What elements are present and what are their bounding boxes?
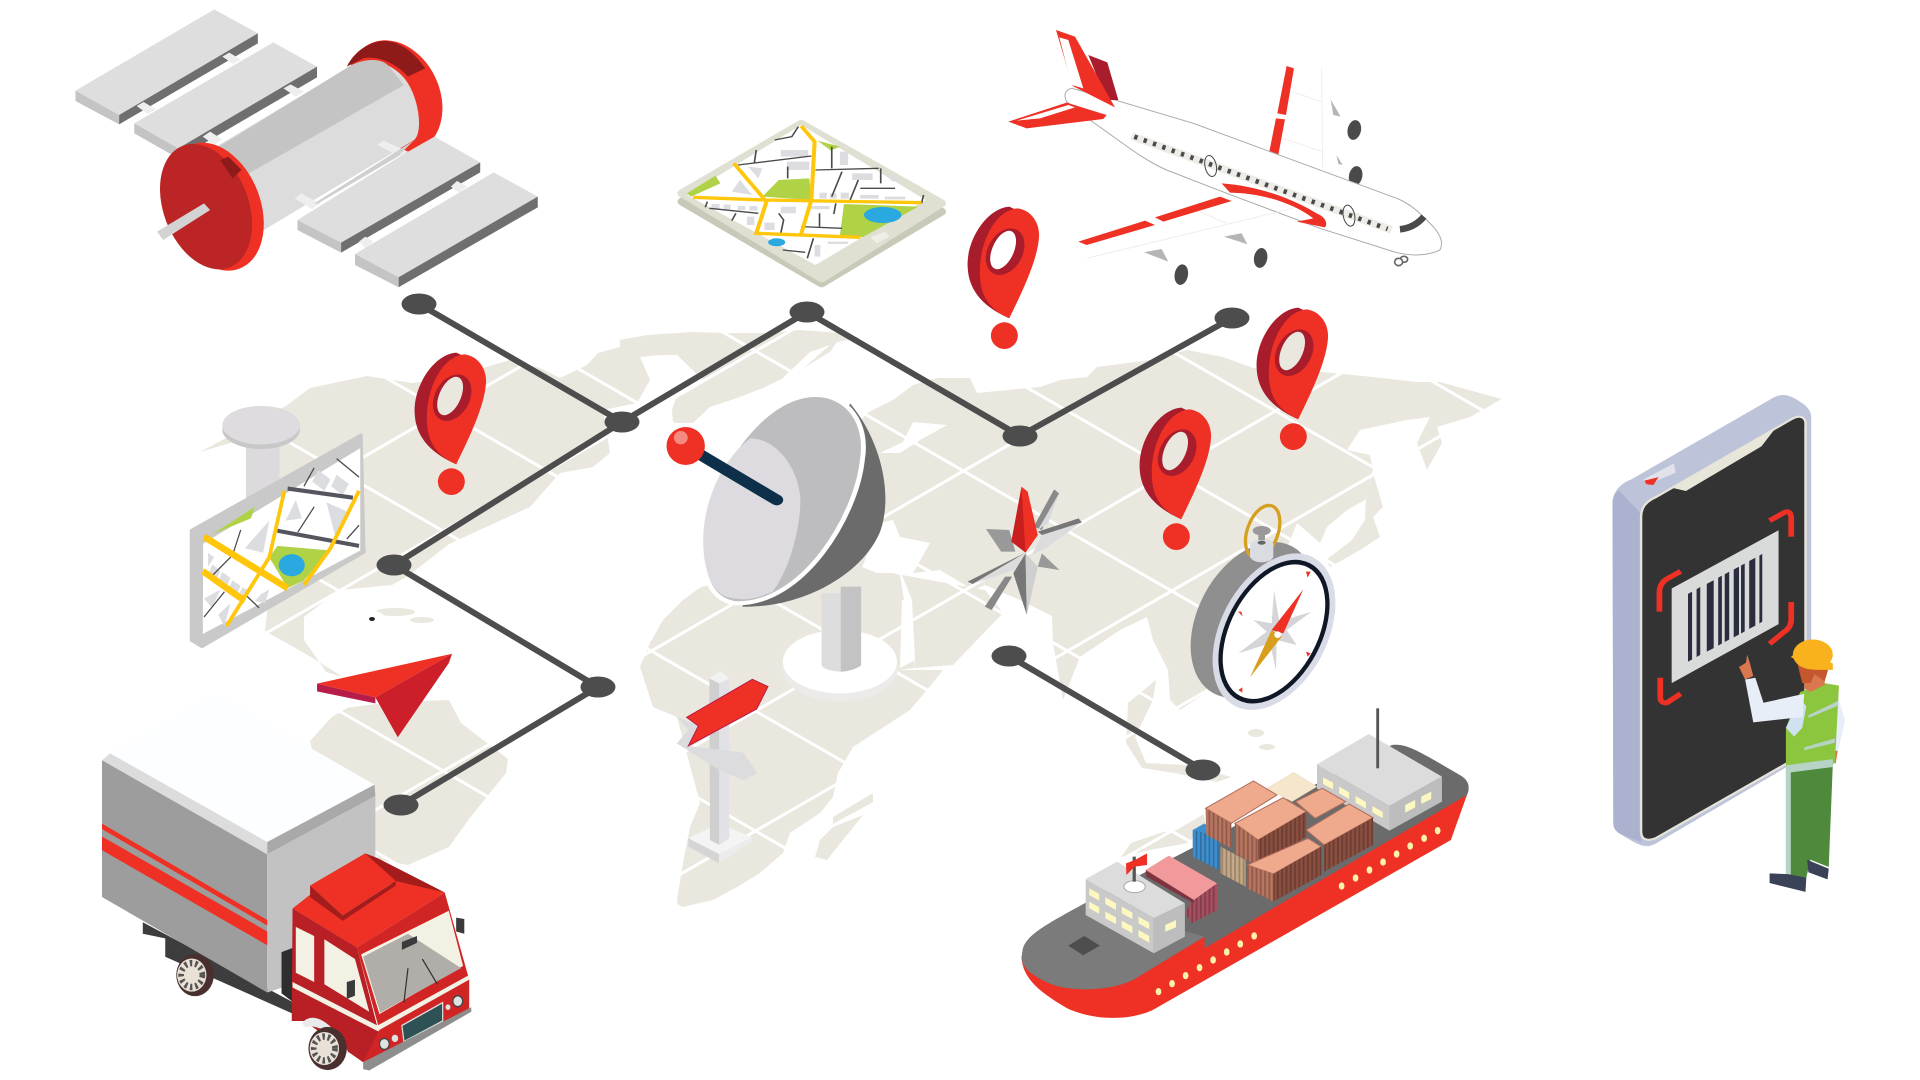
- landmass: japan: [1326, 473, 1383, 567]
- icon: satellite: [75, 9, 538, 287]
- icon: roadside gps billboard: [191, 406, 364, 646]
- icon: airplane: [1008, 30, 1442, 286]
- solar panels lower: [295, 137, 538, 287]
- landmass: south america: [310, 700, 508, 865]
- landmass: indonesia: [1126, 680, 1231, 782]
- icon: compass star: [968, 487, 1082, 615]
- solar panels upper: [75, 9, 317, 158]
- deck: [1022, 745, 1469, 989]
- red sign: [687, 679, 768, 746]
- truck chassis and rear wheel: [143, 922, 294, 1014]
- icon: map pin far right: [1257, 308, 1328, 450]
- billboard post: [222, 406, 300, 500]
- billboard map detail: [203, 459, 359, 626]
- landmass: eurasia: [780, 350, 1505, 710]
- map buildings: [711, 150, 905, 257]
- icon: map pin left: [415, 353, 486, 495]
- icon: navigation arrow: [317, 654, 452, 737]
- bow building: [1086, 853, 1185, 953]
- compass rose and needle: [1238, 572, 1312, 693]
- icon: map pin above plane: [968, 207, 1039, 349]
- scan brackets: [1659, 512, 1791, 703]
- icon: cargo ship: [1021, 708, 1469, 1018]
- dish base: [782, 587, 898, 702]
- map parks and water: [687, 141, 918, 246]
- route network: [376, 294, 1250, 816]
- landmass: africa: [640, 563, 943, 908]
- cargo box: [102, 694, 375, 1003]
- cabin windows: [1132, 136, 1424, 230]
- barcode: [1672, 530, 1779, 683]
- stern building: [1317, 708, 1442, 831]
- landmass: madagascar: [815, 815, 863, 860]
- landmass: arabia: [902, 575, 1003, 668]
- icon: pocket compass: [1165, 501, 1361, 731]
- compass loop and knob: [1239, 501, 1286, 563]
- fuselage: [1065, 88, 1442, 255]
- compass casing: [1165, 521, 1361, 731]
- islands: [375, 608, 1275, 750]
- tail: [1008, 30, 1118, 128]
- far wing and engines: [1269, 66, 1364, 187]
- phone notch and speaker: [1643, 428, 1776, 491]
- icon: signpost: [677, 671, 768, 863]
- world map: [200, 330, 1505, 908]
- signpost base: [688, 823, 752, 863]
- dish back: [742, 403, 885, 607]
- landmass: east african islet: [833, 793, 873, 824]
- lower sign: [677, 717, 757, 780]
- signpost pole: [709, 671, 729, 845]
- far disc: [334, 32, 456, 161]
- icon: satellite dish: [667, 395, 898, 702]
- inland seas: [765, 345, 947, 668]
- dish antenna: [667, 427, 777, 500]
- dish face: [701, 395, 863, 603]
- truck cab: [292, 853, 471, 1071]
- worker: [1739, 640, 1845, 892]
- near disc: [152, 134, 279, 279]
- near wing: [1078, 183, 1326, 286]
- icon: map pin centre right: [1140, 408, 1211, 550]
- containers: [1146, 772, 1373, 923]
- icon: smartphone barcode scanner: [1613, 395, 1845, 892]
- map roads: [693, 126, 922, 237]
- landmass: north america and greenland: [200, 330, 860, 677]
- landmass: australia: [1121, 813, 1206, 857]
- map streets: [705, 127, 924, 258]
- icon: tablet with city map: [682, 124, 941, 283]
- icon: delivery truck: [102, 694, 471, 1071]
- portholes: [1156, 827, 1441, 995]
- satellite body: [216, 61, 419, 232]
- nose gear: [1395, 256, 1408, 266]
- hull: [1021, 780, 1469, 1018]
